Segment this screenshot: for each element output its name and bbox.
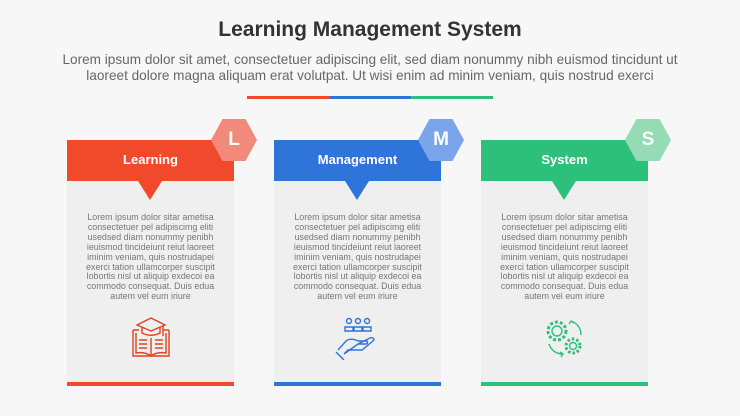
panel: learning: ieuismod tincideiunt reiut laoreet — [87, 242, 214, 252]
panel: system: commodo consequat. Duis edua — [501, 281, 628, 291]
hexagon: L — [211, 119, 257, 161]
panel: management: exerci tation ullamcorper suscipit — [293, 262, 422, 272]
panel: learning: lobortis nisl ut aliquip exdecoi ea — [87, 271, 214, 281]
panel: management: autem vel eum iriure — [317, 291, 398, 301]
subtitle: Lorem ipsum dolor sit amet, consectetuer adipiscing elit, sed diam nonummy nibh euismod tincidunt ut — [62, 52, 678, 67]
hexagon: M: M — [433, 129, 449, 150]
panel: learning: Lorem ipsum dolor sitar ametisa — [87, 212, 214, 222]
panel: learning: usedsed diam nonummy penibh — [88, 232, 213, 242]
panel: learning — [67, 140, 234, 386]
panel: system: System — [541, 152, 588, 167]
panel: system: Lorem ipsum dolor sitar ametisa — [501, 212, 628, 222]
icon: book with cap — [132, 317, 170, 357]
panel: system: exerci tation ullamcorper suscipit — [500, 262, 629, 272]
panel: system: autem vel eum iriure — [524, 291, 605, 301]
panel: management — [274, 140, 441, 386]
panel: management: consectetuer pel adipiscimg eliti — [295, 222, 420, 232]
divider — [247, 96, 493, 99]
panel: management: iminim veniam, quis nostrudapei — [294, 252, 421, 262]
hexagon: M — [418, 119, 464, 161]
panel: learning: Learning — [123, 152, 178, 167]
panel: learning: autem vel eum iriure — [110, 291, 191, 301]
subtitle — [62, 52, 678, 83]
hexagon: S — [625, 119, 671, 161]
icon: hand with people — [336, 318, 375, 360]
panel: system: ieuismod tincideiunt reiut laoreet — [501, 242, 628, 252]
subtitle: laoreet dolore magna aliquam erat volutpat. Ut wisi enim ad minim veniam, quis nostrud exerci — [86, 68, 654, 83]
title: Learning Management System — [218, 18, 522, 41]
panel: system: iminim veniam, quis nostrudapei — [501, 252, 628, 262]
panel: management: Management — [318, 152, 397, 167]
panel: management: lobortis nisl ut aliquip exdecoi ea — [294, 271, 421, 281]
panel: learning: consectetuer pel adipiscimg eliti — [88, 222, 213, 232]
panel: system: lobortis nisl ut aliquip exdecoi ea — [501, 271, 628, 281]
panel: learning: exerci tation ullamcorper suscipit — [86, 262, 215, 272]
hexagon: S: S — [642, 129, 654, 150]
panel: management: ieuismod tincideiunt reiut laoreet — [294, 242, 421, 252]
panel: learning: commodo consequat. Duis edua — [87, 281, 214, 291]
hexagon: L: L — [228, 129, 240, 150]
panel: management: commodo consequat. Duis edua — [294, 281, 421, 291]
panel: learning: iminim veniam, quis nostrudapei — [87, 252, 214, 262]
panel: system: usedsed diam nonummy penibh — [502, 232, 627, 242]
panel: system: consectetuer pel adipiscimg eliti — [502, 222, 627, 232]
icon: gears — [546, 320, 582, 358]
panel: management: Lorem ipsum dolor sitar ametisa — [294, 212, 421, 222]
panel: management: usedsed diam nonummy penibh — [295, 232, 420, 242]
panel: system — [481, 140, 648, 386]
